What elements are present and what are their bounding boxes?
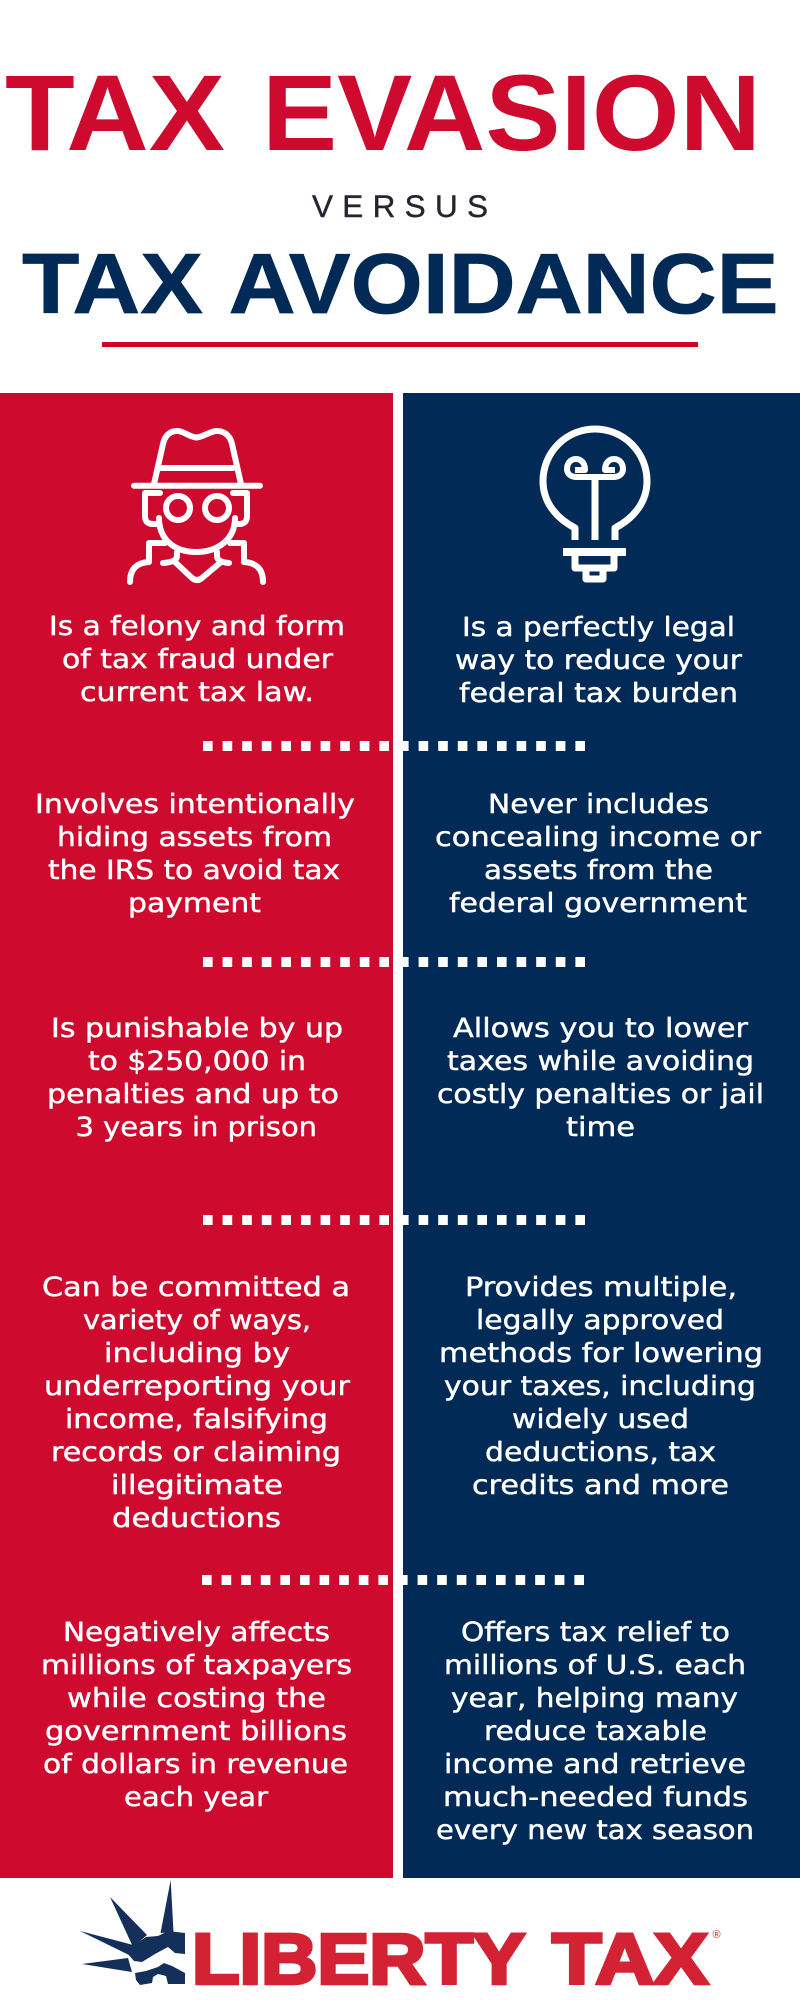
text: felony: Is a felony and form [49,611,345,642]
panel: tax avoidance column [403,393,800,1878]
text: hiding assets: hiding assets from [57,822,332,853]
text: hiding assets: payment [128,888,261,919]
text: hiding assets: Involves intentionally [35,789,355,820]
text: felony: of tax fraud under [62,644,333,675]
text: negative effects: of dollars in revenue [43,1749,348,1780]
title: tax evasion: TAX [5,53,225,173]
registered mark: ® [712,1929,721,1941]
text: approved methods: methods for lowering [439,1338,763,1369]
text: felony: current tax law. [80,677,314,708]
text: never concealing: assets from the [484,855,713,886]
text: penalties: penalties and up to [47,1079,339,1110]
text: negative effects: while costing the [67,1683,326,1714]
title: tax evasion [5,53,761,173]
text: approved methods: Provides multiple, [465,1272,737,1303]
text: negative effects: government billions [45,1716,347,1747]
text: never concealing [435,789,761,919]
text: penalties: Is punishable by up [51,1013,343,1044]
text: negative effects: Negatively affects [63,1617,330,1648]
text: approved methods: deductions, tax [485,1437,716,1468]
text: hiding assets: the IRS to avoid tax [48,855,340,886]
text: ways committed: deductions [112,1503,281,1534]
text: approved methods: widely used [512,1404,689,1435]
text: approved methods: your taxes, including [444,1371,756,1402]
text: negative effects: each year [124,1782,268,1813]
text: negative effects [41,1617,352,1813]
logo: liberty tax [80,1880,721,2000]
icon: statue of liberty crown [80,1880,185,1985]
text: tax relief: millions of U.S. each [444,1650,746,1681]
text: approved methods [439,1272,763,1501]
text: approved methods: credits and more [472,1470,729,1501]
text: tax relief: much-needed funds [443,1782,748,1813]
title: tax evasion: EVASION [262,53,761,173]
text: lower taxes: costly penalties or jail [437,1079,764,1110]
text: ways committed: illegitimate [111,1470,283,1501]
text: ways committed: Can be committed a [42,1272,350,1303]
text: never concealing: Never includes [488,789,709,820]
text: hiding assets [35,789,355,919]
icon: light bulb [543,429,647,579]
heading: versus: VERSUS [312,188,488,224]
title underline [102,342,698,347]
icon: detective [130,431,263,582]
wordmark [192,1920,708,2000]
text: penalties [47,1013,343,1143]
text: ways committed: variety of ways, [83,1305,311,1336]
text: ways committed: income, falsifying [65,1404,328,1435]
title: tax avoidance: AVOIDANCE [229,237,779,332]
text: tax relief [436,1617,754,1846]
text: lower taxes: time [566,1112,635,1143]
wordmark: LIBERTY [192,1920,525,2000]
text: never concealing: concealing income or [435,822,761,853]
text: lower taxes [437,1013,764,1143]
text: ways committed: records or claiming [51,1437,341,1468]
text: lower taxes: Allows you to lower [453,1013,748,1044]
text: legal: way to reduce your [455,645,742,676]
text: penalties: to $250,000 in [88,1046,306,1077]
text: approved methods: legally approved [476,1305,724,1336]
text: lower taxes: taxes while avoiding [447,1046,754,1077]
text: felony [49,611,345,708]
panel: tax evasion column [0,393,393,1878]
title: tax avoidance [22,237,779,332]
text: ways committed [42,1272,350,1534]
text: ways committed: underreporting your [44,1371,350,1402]
text: tax relief: Offers tax relief to [461,1617,730,1648]
text: ways committed: including by [104,1338,290,1369]
text: penalties: 3 years in prison [76,1112,317,1143]
text: negative effects: millions of taxpayers [41,1650,352,1681]
text: legal: federal tax burden [459,678,738,709]
text: never concealing: federal government [449,888,747,919]
title: tax avoidance: TAX [22,237,203,332]
text: tax relief: every new tax season [436,1815,754,1846]
text: tax relief: reduce taxable [484,1716,707,1747]
wordmark: TAX [552,1920,708,2000]
text: tax relief: income and retrieve [444,1749,746,1780]
text: legal [455,612,742,709]
text: legal: Is a perfectly legal [462,612,735,643]
text: tax relief: year, helping many [451,1683,738,1714]
